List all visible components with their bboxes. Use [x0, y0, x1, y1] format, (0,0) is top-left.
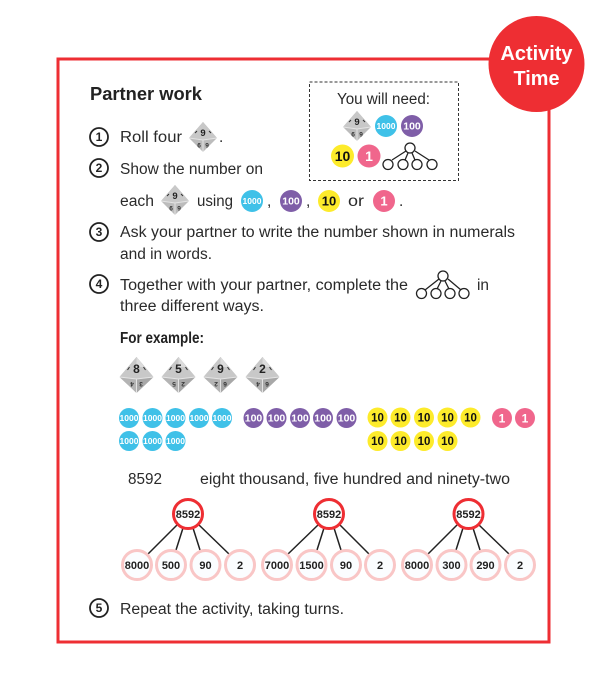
hundreds counters: 100 — [291, 412, 309, 424]
die: 9: 9 — [217, 362, 224, 376]
number in words: eight thousand, five hundred and ninety-two — [200, 471, 510, 488]
step 4 — [90, 271, 489, 315]
icon: part-whole model — [416, 271, 469, 298]
icon: die: 9 — [172, 191, 178, 202]
tens counters: 10 — [441, 436, 454, 448]
badge: Activity Time: Time — [514, 68, 560, 90]
step 3 — [90, 223, 515, 263]
die: 2 — [246, 357, 280, 393]
die: 5 — [162, 357, 196, 393]
part-whole model 3: 2 — [517, 560, 523, 572]
die: 5: 2 — [181, 380, 185, 387]
icon: 1 counter — [358, 144, 380, 168]
icon: 1000 counter: 1000 — [377, 121, 396, 131]
icon: die: 6 — [177, 204, 181, 211]
step 3: and in words. — [120, 246, 212, 263]
icon: 1 counter: 1 — [380, 194, 388, 208]
part-whole model 3: 8000 — [405, 560, 429, 572]
tens counters: 10 — [394, 436, 407, 448]
part-whole model 2 — [262, 500, 394, 580]
hundreds counters: 100 — [245, 412, 262, 424]
badge: Activity Time — [488, 16, 584, 112]
part-whole model 1: 90 — [199, 560, 212, 572]
part-whole model 2: 7000 — [265, 560, 289, 572]
thousands counters: 1000 — [120, 436, 139, 446]
die: 8: 8 — [133, 362, 140, 376]
icon: die — [343, 111, 371, 141]
part-whole model 1: 8592 — [176, 509, 200, 521]
die: 9 — [204, 357, 238, 393]
tens counters: 10 — [418, 436, 430, 448]
part-whole model 1: 2 — [237, 560, 243, 572]
step 4: three different ways. — [120, 298, 264, 315]
icon: 10 counter — [331, 144, 354, 168]
die: 8 — [120, 357, 154, 393]
part-whole model 2: 2 — [377, 560, 383, 572]
icon: die — [189, 122, 217, 152]
part-whole model 3: 8592 — [456, 509, 481, 521]
step 2: 2 — [96, 161, 103, 175]
part-whole model 3: 300 — [442, 560, 461, 572]
thousands counters: 1000 — [120, 413, 139, 423]
tens counters: 10 — [464, 412, 477, 424]
part-whole model 2: 90 — [340, 560, 352, 572]
ones counters: 1 — [499, 412, 506, 426]
step 2: each — [120, 193, 154, 210]
panel: activity frame — [58, 59, 549, 642]
step 2: or — [348, 193, 364, 210]
part-whole model 1 — [122, 500, 254, 580]
thousands counters: 1000 — [190, 413, 209, 423]
subheading: For example: For example: — [120, 330, 204, 347]
icon: 10 counter: 10 — [322, 194, 336, 208]
icon: die: 6 — [359, 130, 363, 137]
step 5: Repeat the activity, taking turns. — [120, 601, 344, 618]
step 2 — [90, 159, 403, 215]
step 4: Together with your partner, complete the — [120, 277, 408, 294]
thousands counters: 1000 — [213, 413, 232, 423]
example dice row — [120, 357, 280, 393]
die: 2: 4 — [256, 380, 260, 387]
badge: Activity Time: Activity — [500, 43, 573, 65]
ones counters: 1 — [522, 412, 529, 426]
die: 9: 6 — [223, 380, 227, 387]
icon: die — [161, 185, 189, 215]
icon: 100 counter — [401, 115, 423, 137]
panel: you will need — [310, 82, 458, 180]
icon: 100 counter: 100 — [403, 120, 421, 132]
step 1 — [90, 122, 223, 152]
icon: 100 counter — [280, 190, 302, 212]
step 2: , — [306, 193, 310, 210]
part-whole model 1: 500 — [162, 560, 180, 572]
icon: 100 counter: 100 — [282, 196, 300, 208]
icon: 1000 counter — [241, 190, 263, 212]
thousands counters: 1000 — [143, 436, 162, 446]
die: 5: 5 — [172, 380, 176, 387]
step 2: . — [399, 193, 403, 210]
icon: 1000 counter — [375, 115, 397, 137]
thousands counters: 1000 — [166, 436, 185, 446]
label: you will need: You will need: — [337, 91, 430, 108]
tens counters: 10 — [418, 412, 430, 424]
tens counters — [368, 408, 480, 451]
number in numerals: 8592 — [128, 471, 162, 488]
icon: 10 counter — [318, 190, 340, 212]
step 2: , — [267, 193, 271, 210]
hundreds counters: 100 — [338, 412, 355, 424]
hundreds counters: 100 — [314, 412, 332, 424]
icon: 1 counter: 1 — [365, 148, 373, 164]
part-whole model 3 — [402, 500, 534, 580]
step 3: Ask your partner to write the number shown in numerals — [120, 224, 515, 241]
thousands counters — [119, 408, 232, 451]
die: 5: 5 — [175, 362, 182, 376]
die: 2: 2 — [259, 362, 266, 376]
hundreds counters — [244, 408, 356, 428]
icon: die: 9 — [354, 117, 360, 128]
step 1: Roll four — [120, 129, 182, 146]
tens counters: 10 — [394, 412, 407, 424]
icon: die: 9 — [169, 204, 173, 211]
die: 8: 4 — [130, 380, 134, 387]
thousands counters: 1000 — [166, 413, 185, 423]
tens counters: 10 — [441, 412, 454, 424]
ones counters — [492, 408, 535, 428]
icon: die: 9 — [197, 141, 201, 148]
step 2: Show the number on — [120, 161, 263, 178]
tens counters: 10 — [371, 436, 384, 448]
part-whole model 2: 8592 — [317, 509, 341, 521]
die: 2: 6 — [265, 380, 269, 387]
icon: 1 counter — [373, 190, 395, 212]
part-whole model 1: 8000 — [125, 560, 149, 572]
part-whole model 3: 290 — [476, 560, 495, 572]
icon: part-whole model — [383, 143, 437, 170]
step 2: using — [197, 193, 233, 210]
icon: die: 9 — [351, 130, 355, 137]
icon: 1000 counter: 1000 — [243, 196, 262, 206]
thousands counters: 1000 — [143, 413, 162, 423]
die: 9: 2 — [214, 380, 218, 387]
step 4: in — [477, 277, 489, 294]
step 1: 1 — [96, 130, 103, 144]
icon: die: 9 — [200, 128, 206, 139]
die: 8: 3 — [139, 380, 143, 387]
step 1: . — [219, 129, 223, 146]
icon: 10 counter: 10 — [335, 148, 350, 164]
hundreds counters: 100 — [268, 412, 285, 424]
part-whole model 2: 1500 — [299, 560, 324, 572]
step 5: 5 — [96, 601, 103, 615]
tens counters: 10 — [371, 412, 384, 424]
step 3: 3 — [96, 225, 103, 239]
heading: Partner work: Partner work — [90, 84, 203, 104]
step 4: 4 — [96, 277, 103, 291]
icon: die: 6 — [205, 141, 209, 148]
